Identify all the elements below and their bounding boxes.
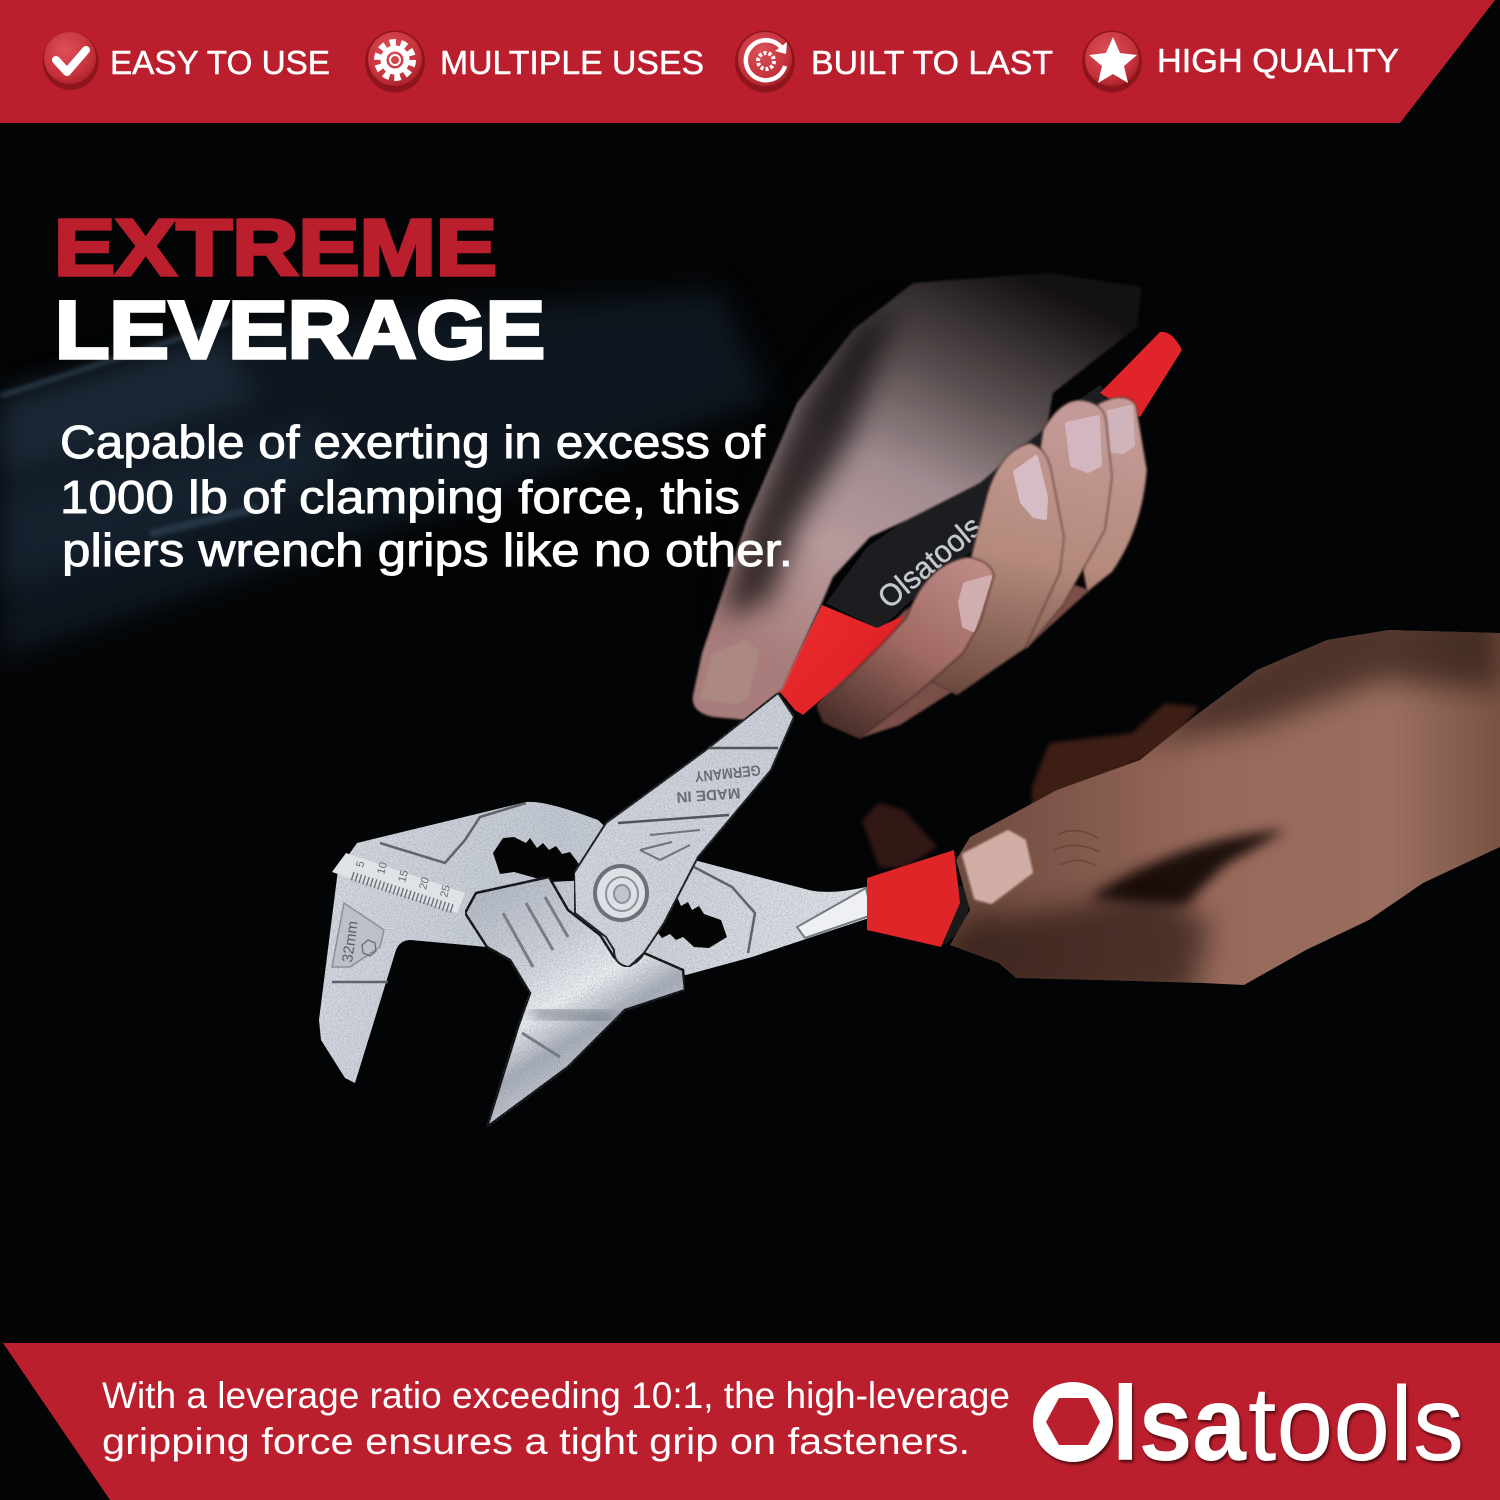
label: high quality: HIGH QUALITY [1157,42,1399,79]
heading line: leverage: LEVERAGE [55,285,545,376]
red sleeve [867,850,960,947]
ruler scale: 15 [396,869,411,884]
jaw size stamp: 32mm [339,920,362,964]
upper hand holding the pliers [693,273,1182,738]
ruler scale [332,853,465,913]
red band shape [0,0,1495,123]
footer text [102,1375,1010,1462]
thumb nail [702,642,758,702]
lower hand [862,610,1500,1000]
icon: gear [365,30,425,92]
little finger nail [1109,407,1133,452]
lower jaw [465,877,685,1127]
background: blurred steel beam [0,290,770,660]
upper handle and pivot plate [574,693,794,967]
right handle plate [797,888,872,938]
footer band [3,1343,1500,1500]
dim finger behind the handle [862,803,937,868]
little finger [1070,397,1147,592]
body text [60,416,793,576]
heading line: extreme: EXTREME [54,203,497,292]
crease between thumb and fingers [1090,830,1286,905]
middle finger [930,443,1064,695]
ruler scale: 5 [354,860,367,869]
ruler scale: 20 [417,876,432,891]
darker top edge of hand [1150,610,1500,745]
lower jaw grip ribs [503,897,568,1057]
jaw size stamp [332,903,384,967]
plier handle: red end cap [1100,332,1182,417]
stamped text: made in germany: GERMANY [694,761,761,785]
pivot disc [593,864,649,922]
label: easy to use: EASY TO USE [110,44,330,81]
back of hand [950,630,1500,985]
back of hand and thumb [693,273,1142,720]
icon: check mark [42,32,98,90]
icon: circular arrow with gear [735,30,795,92]
lower jaw dark reflection [532,1012,612,1018]
body text: Capable of exerting in excess of [60,416,765,468]
footer text: With a leverage ratio exceeding 10:1, the high-leverage [102,1375,1010,1416]
plier handle: black grip [826,385,1130,630]
dim upper fingers [1032,703,1199,810]
label: built to last: BUILT TO LAST [811,44,1053,81]
darker fingers below thumb [950,878,1222,983]
palm below the handle [817,560,1090,738]
index finger [817,557,994,738]
logo stamp [640,830,700,860]
ring finger [1005,400,1112,648]
brand logo: tools [1248,1365,1464,1483]
stamped text: made in germany: MADE IN [676,784,741,805]
ruler scale: 10 [375,861,390,876]
pliers wrench [319,693,872,1127]
index finger nail [960,577,990,630]
brand logo [1031,1361,1464,1484]
body text: 1000 lb of clamping force, this [60,471,740,523]
hand shading clipped to the hand [950,630,1500,983]
brand logo: lsa [1112,1365,1247,1483]
hand shadow on left side [720,300,900,620]
brand logo: O [1031,1361,1115,1484]
header band [0,0,1495,123]
heading [54,203,545,376]
jaw grooves [332,803,755,982]
black handle tip [945,880,972,945]
icon: star [1082,30,1142,92]
plier handle: red sleeve [780,605,905,715]
label: multiple uses: MULTIPLE USES [440,44,704,81]
teeth opening right [654,897,727,948]
middle finger nail [1015,457,1046,518]
knuckle wrinkles [1054,831,1100,866]
ring finger nail [1067,417,1100,471]
thumb nail [964,832,1031,902]
back plier body with upper jaw and ruler [319,802,872,1083]
teeth opening left [493,837,590,882]
upper handle grooves [618,748,778,823]
ruler scale: 25 [438,884,453,899]
red band shape [3,1343,1500,1500]
handle brand text: Olsatools [871,509,988,615]
stamped text: made in germany [676,761,761,805]
footer text: gripping force ensures a tight grip on fasteners. [102,1421,970,1462]
body text: pliers wrench grips like no other. [62,524,793,576]
